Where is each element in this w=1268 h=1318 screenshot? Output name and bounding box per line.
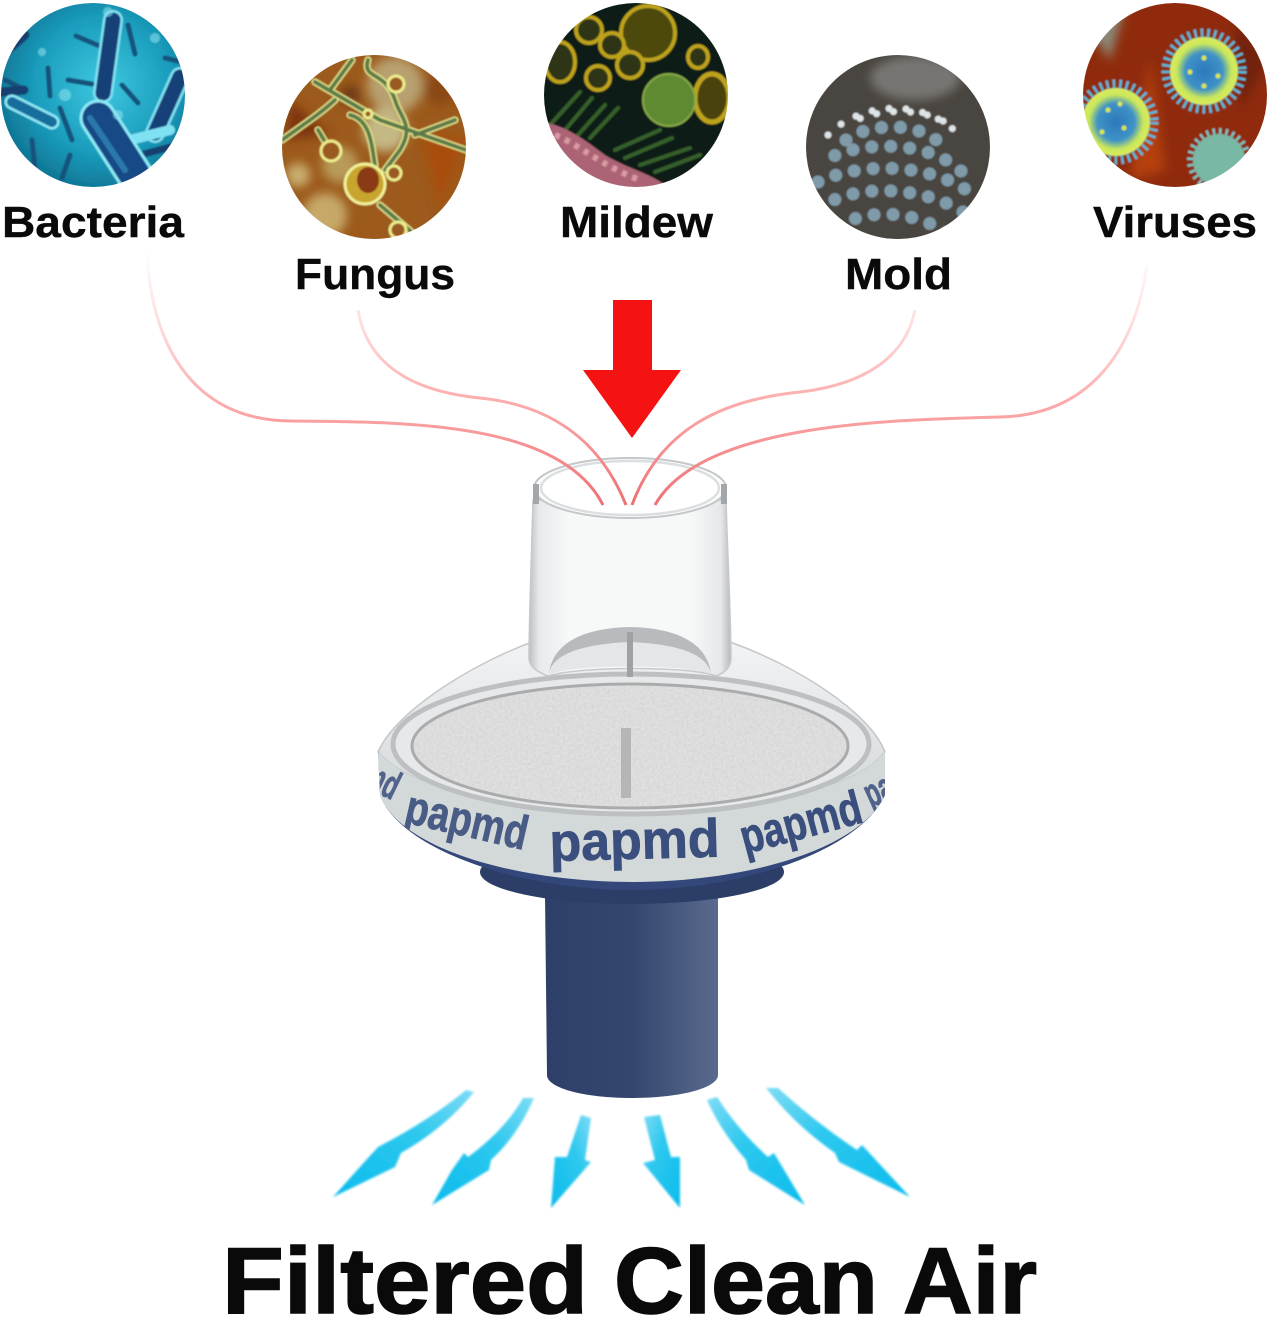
arrows: clean air outflow <box>333 1088 910 1208</box>
arrow 1 <box>333 1090 474 1197</box>
label: Mildew: Mildew <box>560 198 714 247</box>
flange: navy underside <box>480 840 784 904</box>
curve: bacteria to inlet <box>147 250 603 505</box>
panel: mildew <box>544 3 728 238</box>
panel: viruses <box>1075 0 1268 247</box>
stem: navy outlet tube <box>545 895 718 1098</box>
cup: clear glass inlet <box>529 458 731 677</box>
label: Bacteria: Bacteria <box>2 198 185 247</box>
label: Fungus: Fungus <box>295 250 455 299</box>
arrow 2 <box>432 1098 534 1205</box>
image: mildew micrograph <box>544 3 728 187</box>
label: Viruses: Viruses <box>1093 198 1257 247</box>
band: papmd branded ring <box>378 750 885 890</box>
arrow 4 <box>643 1115 680 1208</box>
curve: viruses to inlet <box>655 265 1147 505</box>
band: papmd branded ring: papmd <box>857 744 946 816</box>
filter media mesh <box>412 684 848 808</box>
icon: red downward arrow <box>583 300 681 438</box>
band: papmd branded ring: papmd <box>401 781 533 861</box>
disc: clear dome shoulders <box>378 642 885 826</box>
curve: mold to inlet <box>632 310 915 505</box>
panel: mold <box>806 55 990 290</box>
arrow 5 <box>707 1097 805 1205</box>
filter device <box>318 458 946 1098</box>
title: Filtered Clean Air <box>222 1228 1037 1318</box>
arrow 6 <box>766 1088 910 1197</box>
disc: rim rings <box>393 674 869 814</box>
band: papmd branded ring: papmd <box>318 735 407 808</box>
panel: fungus <box>282 55 466 298</box>
image: fungus micrograph <box>282 55 466 239</box>
arrow 3 <box>551 1115 591 1208</box>
image: virus micrograph <box>1083 3 1267 187</box>
curve: fungus to inlet <box>358 310 626 505</box>
label: Mold: Mold <box>845 250 952 299</box>
band: papmd branded ring: papmd <box>734 781 868 865</box>
panel: bacteria <box>0 0 193 247</box>
image: bacteria micrograph <box>1 3 185 187</box>
image: mold micrograph <box>806 55 990 239</box>
band: papmd branded ring: papmd <box>549 809 720 873</box>
